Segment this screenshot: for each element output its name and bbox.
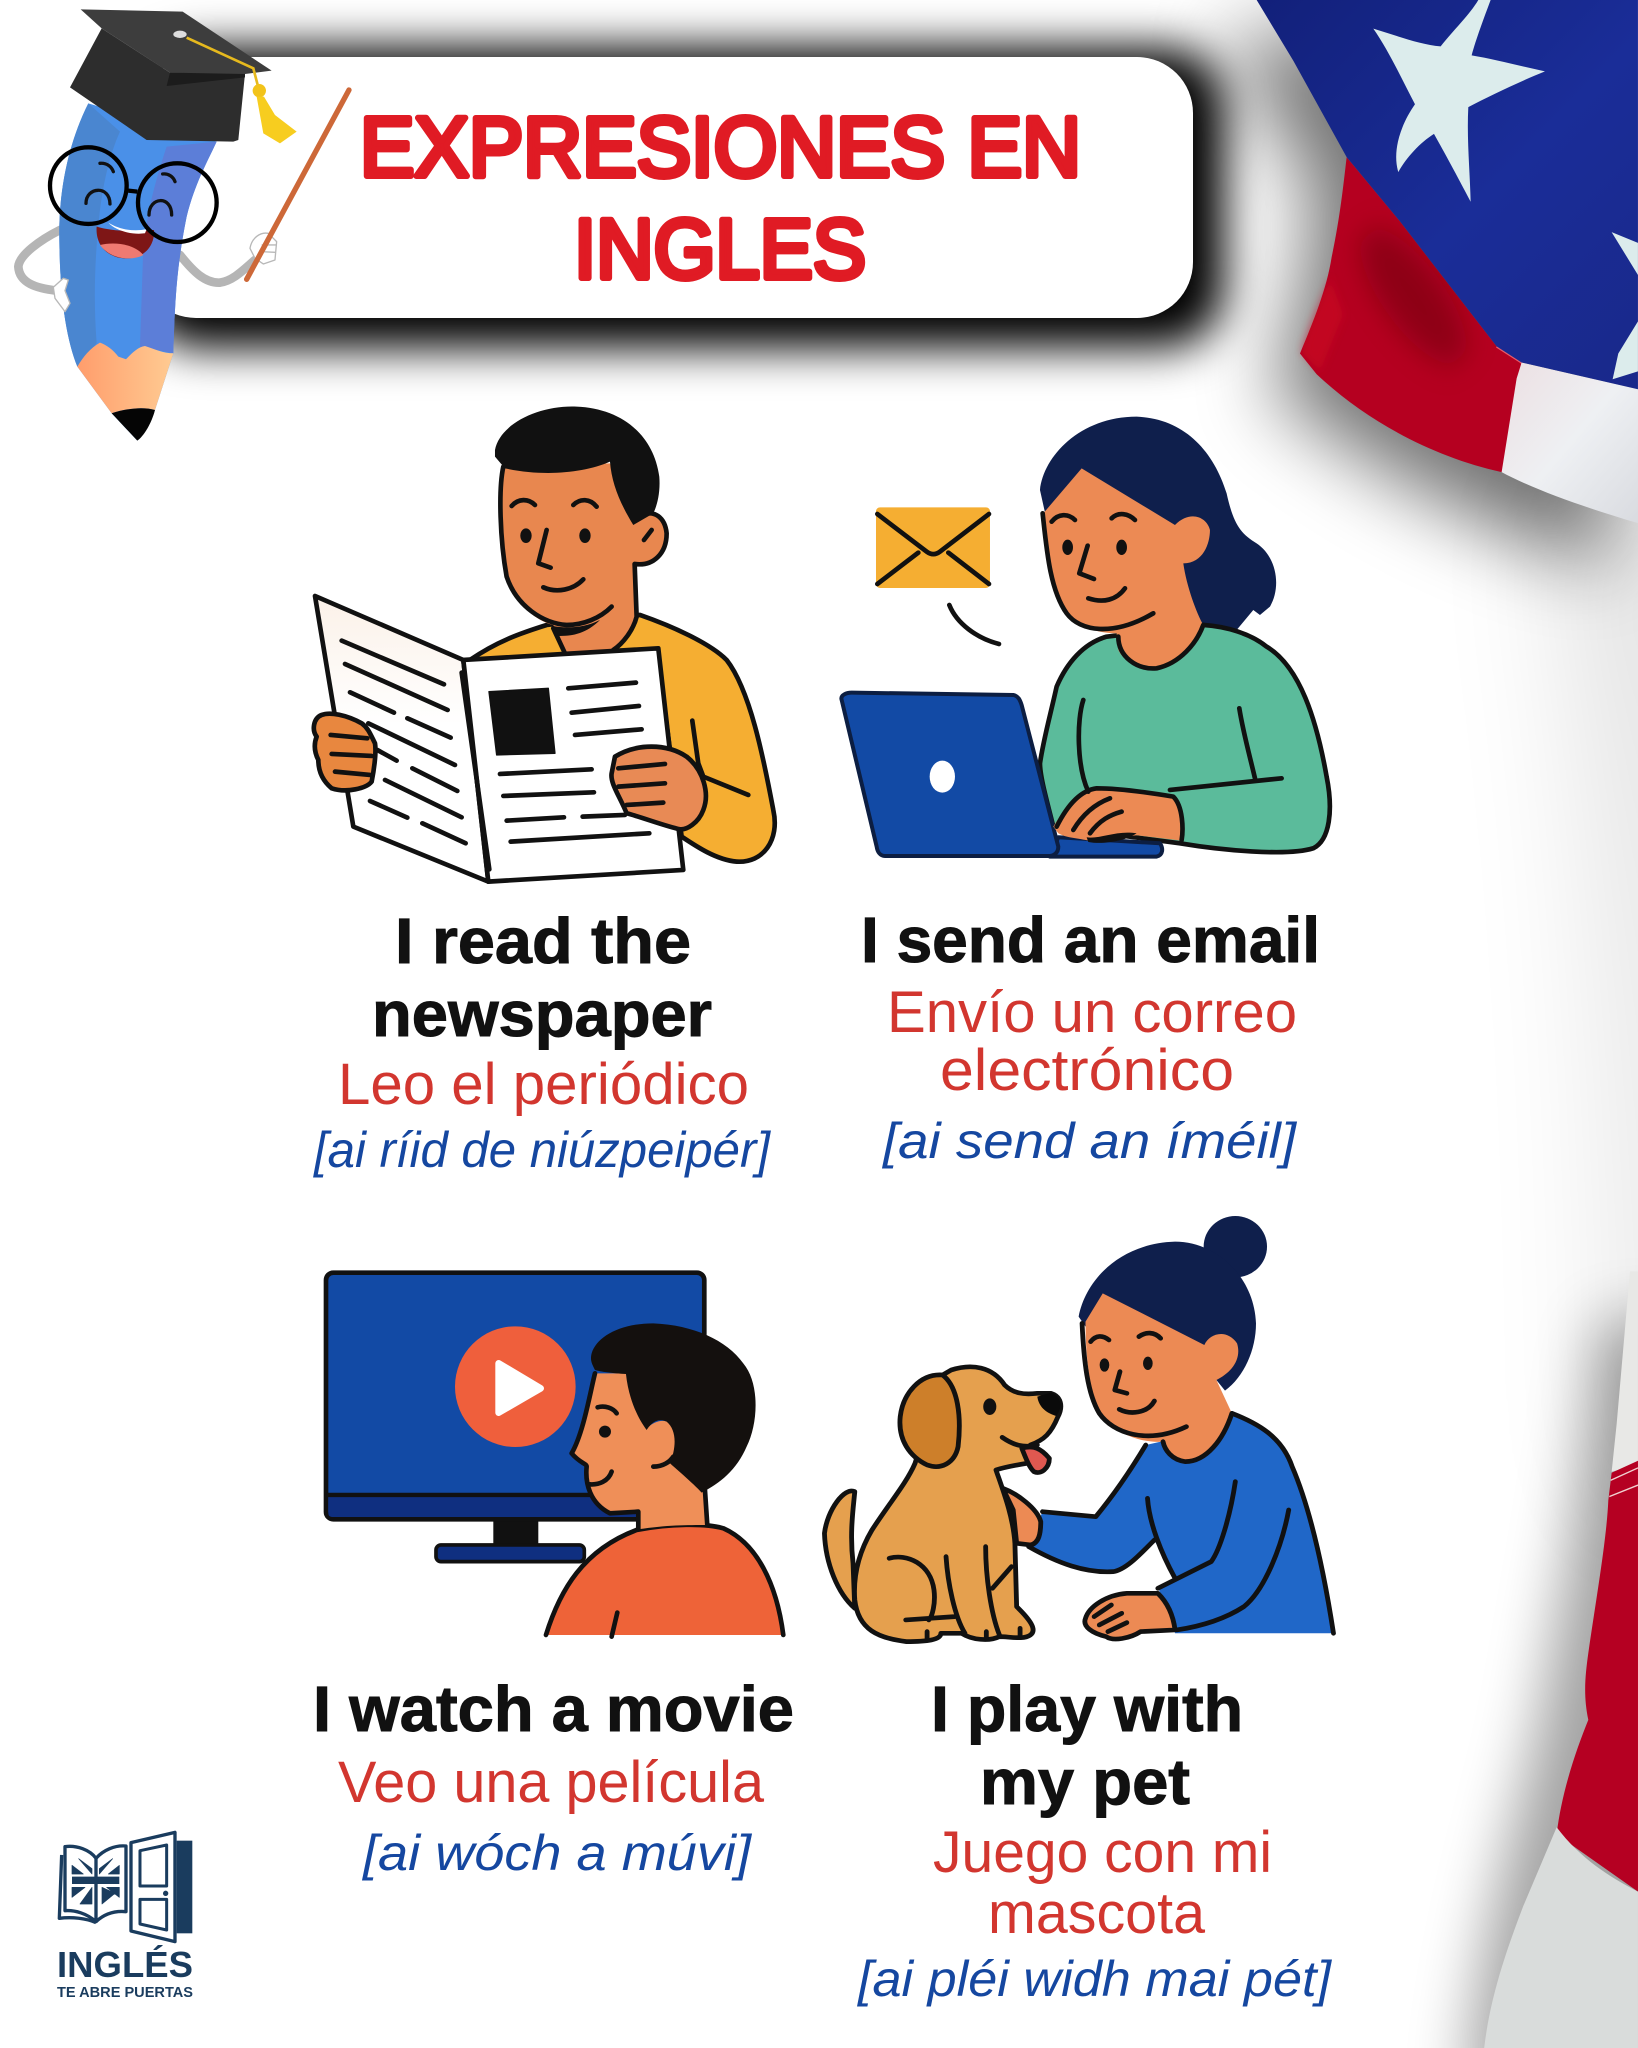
mascot pencil body	[59, 103, 217, 441]
mascot face	[86, 163, 175, 258]
heading block: pet: [ai pléi widh mai pét]	[857, 1951, 1332, 2007]
hair	[591, 1323, 756, 1493]
dog tail	[824, 1491, 855, 1608]
head	[1043, 468, 1210, 667]
title: EXPRESIONES EN	[360, 100, 1081, 194]
logo: ingles te abre puertas	[57, 1832, 193, 2001]
dog ear	[900, 1375, 959, 1467]
illustration: boy watching movie	[326, 1273, 783, 1637]
heading block: pet: I play with	[931, 1673, 1243, 1745]
heading block: email: I send an email	[861, 904, 1320, 976]
logo text: INGLÉS	[57, 1944, 193, 1985]
sweater	[1040, 625, 1330, 852]
flag white fold	[1482, 1827, 1638, 2048]
heading block: movie	[313, 1673, 794, 1881]
heading block: movie: I watch a movie	[313, 1673, 794, 1745]
head and neck	[500, 463, 667, 653]
pencil mascot	[18, 9, 349, 441]
hair bun	[1204, 1216, 1267, 1277]
heading block: movie: Veo una película	[338, 1750, 765, 1815]
newspaper right page	[463, 648, 683, 882]
motion arc	[949, 605, 999, 644]
sweater	[1029, 1413, 1333, 1633]
hair	[1040, 417, 1276, 630]
flag bottom right	[1482, 1271, 1638, 2048]
heading block: email: electrónico	[940, 1038, 1234, 1103]
head	[1082, 1293, 1238, 1462]
illustration: woman sending email	[841, 417, 1330, 857]
illustration: man reading newspaper	[314, 407, 775, 882]
title panel	[140, 57, 1193, 318]
newspaper left page	[315, 596, 488, 882]
dog nose	[1037, 1393, 1060, 1416]
flag red stripe	[1300, 157, 1533, 472]
mascot hands	[53, 233, 277, 312]
heading block: newspaper	[313, 905, 771, 1178]
dog body	[854, 1367, 1061, 1642]
face details	[512, 500, 652, 590]
lower hand	[1085, 1593, 1175, 1639]
mascot glasses	[50, 147, 217, 242]
icon: envelope	[876, 507, 990, 588]
heading block: email	[861, 904, 1320, 1169]
shirt	[546, 1525, 783, 1637]
sleeve lines	[1148, 1482, 1289, 1630]
face lines	[1043, 513, 1203, 668]
heading block: pet: my pet	[980, 1746, 1190, 1818]
dog tongue	[1022, 1447, 1049, 1473]
illustration: woman and dog	[824, 1216, 1333, 1642]
heading block: pet	[857, 1673, 1332, 2007]
flag red fold	[1557, 1461, 1638, 1892]
flag blue canton	[1257, 0, 1638, 389]
flag white stripe	[1502, 362, 1638, 523]
right hand	[611, 721, 748, 829]
mascot pointer stick	[247, 90, 349, 279]
heading block: newspaper: newspaper	[372, 978, 712, 1050]
heading block: newspaper: Leo el periódico	[338, 1052, 749, 1117]
head	[572, 1373, 707, 1529]
title	[360, 100, 1081, 296]
heading block: email: Envío un correo	[887, 980, 1297, 1045]
flag top right	[1257, 0, 1638, 523]
sweater	[470, 615, 775, 862]
flag pale strip	[1612, 1271, 1638, 1472]
dog eye	[983, 1398, 996, 1415]
title panel shadow	[140, 47, 1225, 348]
dog lines	[889, 1437, 1037, 1638]
hand and sleeve lines	[1053, 700, 1282, 843]
heading block: newspaper: I read the	[395, 905, 691, 977]
icon: book and door	[59, 1832, 192, 1942]
monitor	[326, 1273, 704, 1562]
newspaper text lines	[342, 641, 649, 869]
right edge shadow	[1560, 450, 1638, 1500]
flag shadow top right	[1220, 35, 1608, 565]
newspaper photo	[489, 688, 555, 755]
heading block: pet: Juego con mi	[933, 1820, 1272, 1885]
mascot arms	[18, 230, 255, 291]
heading block: email: [ai send an íméil]	[882, 1113, 1297, 1169]
heading block: movie: [ai wóch a múvi]	[362, 1825, 752, 1881]
hair	[495, 407, 660, 525]
flag stitching	[1609, 1468, 1638, 1497]
heading block: newspaper: [ai ríid de niúzpeipér]	[313, 1122, 771, 1178]
hair	[1079, 1242, 1256, 1391]
flag shadow bottom right	[1465, 1320, 1638, 2048]
icon: star	[1373, 0, 1545, 202]
mascot graduation cap	[70, 9, 297, 143]
icon: star fragment	[1612, 232, 1638, 379]
laptop	[841, 693, 1162, 857]
petting hand	[1003, 1488, 1041, 1545]
icon: play button	[455, 1326, 576, 1447]
left hand	[314, 714, 375, 790]
heading block: pet: mascota	[988, 1881, 1206, 1946]
logo: ingles te abre puertas: TE ABRE PUERTAS	[57, 1985, 193, 2001]
title: INGLES	[574, 202, 866, 296]
